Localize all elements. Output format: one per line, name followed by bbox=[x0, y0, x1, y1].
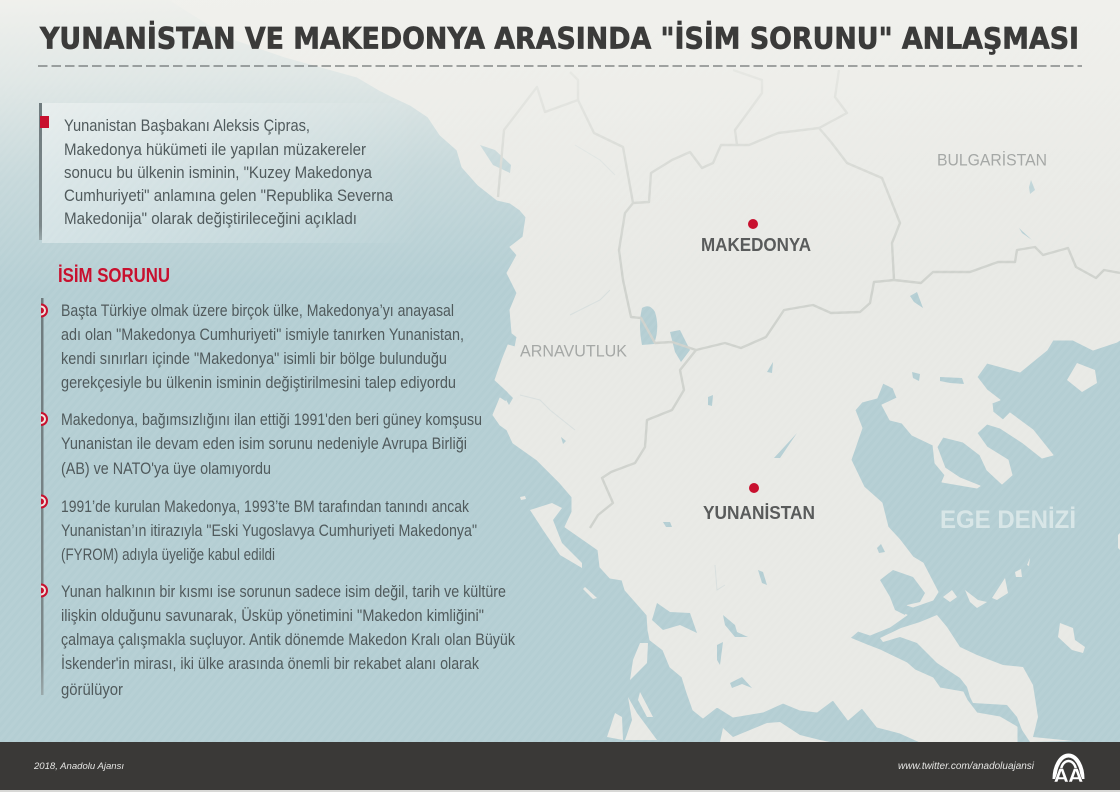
icon: Anadolu Agency logo: AA bbox=[1054, 765, 1083, 787]
heading: isim sorunu: İSİM SORUNU bbox=[58, 264, 170, 287]
bullet point 4: İskender'in mirası, iki ülke arasında önemli bir rekabet alanı olarak bbox=[61, 654, 479, 673]
Euboea island bbox=[880, 615, 1073, 742]
bullet point 2 bbox=[41, 410, 482, 478]
label: Ege Denizi: EGE DENİZİ bbox=[940, 506, 1076, 534]
rivers bbox=[520, 145, 725, 590]
bullet point 1: gerekçesiyle bu ülkenin isminin değiştirilmesini talep ediyordu bbox=[61, 373, 456, 392]
bullet point 1 bbox=[41, 301, 464, 392]
bullet point 3: Yunanistan’ın itirazıyla "Eski Yugoslavya Cumhuriyeti Makedonya" bbox=[61, 521, 477, 540]
label: Makedonya with marker: MAKEDONYA bbox=[701, 235, 811, 255]
land mass bbox=[170, 0, 1120, 742]
bullet point 4 bbox=[41, 582, 515, 699]
bullet point 4: Yunan halkının bir kısmı ise sorunun sadece isim değil, tarih ve kültüre bbox=[61, 582, 506, 601]
intro text: Yunanistan Başbakanı Aleksis Çipras, bbox=[64, 116, 310, 135]
intro text: Makedonija" olarak değiştirileceğini açıkladı bbox=[64, 209, 357, 228]
Corfu and Ionian islands bbox=[520, 496, 830, 742]
lakes and gulfs bbox=[480, 145, 1035, 688]
bullet point 1: adı olan "Makedonya Cumhuriyeti" ismiyle tanırken Yunanistan, bbox=[61, 325, 464, 344]
bullet point 1: Başta Türkiye olmak üzere birçok ülke, Makedonya’yı anayasal bbox=[61, 301, 454, 320]
timeline bar bbox=[41, 298, 44, 695]
footer bar bbox=[0, 742, 1120, 790]
intro text: sonucu bu ülkenin isminin, "Kuzey Makedonya bbox=[64, 163, 372, 182]
label: Arnavutluk: ARNAVUTLUK bbox=[520, 342, 628, 360]
bullet point 4: görülüyor bbox=[61, 680, 123, 699]
label: Yunanistan with marker: YUNANİSTAN bbox=[703, 503, 815, 523]
label: Makedonya with marker bbox=[701, 219, 811, 255]
footer link: www.twitter.com/anadoluajansi bbox=[898, 761, 1035, 772]
bullet point 2: Yunanistan ile devam eden isim sorunu nedeniyle Avrupa Birliği bbox=[61, 434, 467, 453]
bullet point 3: 1991’de kurulan Makedonya, 1993’te BM tarafından tanındı ancak bbox=[61, 497, 469, 516]
intro text bbox=[64, 116, 393, 228]
label: Bulgaristan: BULGARİSTAN bbox=[937, 150, 1047, 170]
national borders bbox=[498, 70, 1120, 528]
icon: Anadolu Agency logo bbox=[1054, 755, 1083, 787]
intro text: Makedonya hükümeti ile yapılan müzakereler bbox=[64, 140, 366, 159]
intro text: Cumhuriyeti" anlamına gelen "Republika Severna bbox=[64, 186, 393, 205]
bullet point 4: çalmaya çalışmakla suçluyor. Antik dönemde Makedon Kralı olan Büyük bbox=[61, 630, 515, 649]
Aegean islands bbox=[943, 363, 1120, 653]
footer credit: 2018, Anadolu Ajansı bbox=[33, 761, 124, 772]
label: Yunanistan with marker bbox=[703, 483, 815, 523]
bullet point 4: ilişkin olduğunu savunarak, Üsküp yönetimini "Makedon kimliğini" bbox=[61, 606, 484, 625]
bullet point 1: kendi sınırları içinde "Makedonya" isimli bir bölge bulunduğu bbox=[61, 349, 447, 368]
bullet point 2: (AB) ve NATO'ya üye olamıyordu bbox=[61, 459, 271, 478]
bullet point 3 bbox=[41, 494, 477, 564]
bullet point 2: Makedonya, bağımsızlığını ilan ettiği 1991'den beri güney komşusu bbox=[61, 410, 482, 429]
intro panel bbox=[39, 103, 422, 243]
bullet point 3: (FYROM) adıyla üyeliğe kabul edildi bbox=[61, 545, 275, 564]
